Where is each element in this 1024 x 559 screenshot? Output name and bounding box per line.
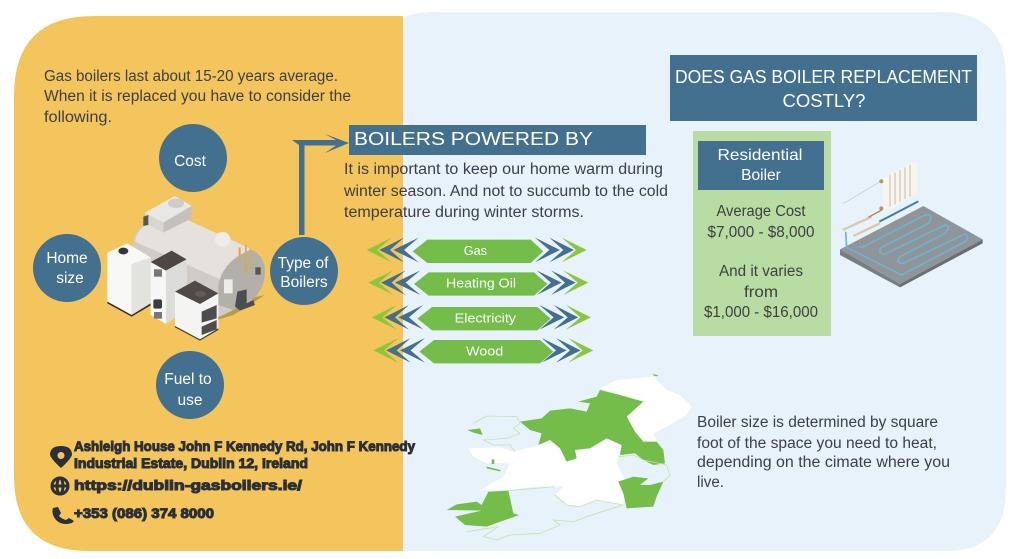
map: Ireland <box>447 374 692 540</box>
fuel list: chevron rows <box>367 238 593 363</box>
average cost text: $7,000 - $8,000 <box>708 224 815 241</box>
circle: fuel to use: Fuel to <box>164 371 212 388</box>
map region: green south west <box>447 491 519 527</box>
icon: boilers illustration <box>107 196 265 341</box>
circle: home size: size <box>56 270 84 287</box>
icon: globe <box>51 478 69 494</box>
circle: home size: Home <box>46 250 88 267</box>
circle: fuel to use <box>156 351 224 419</box>
cost range text: And it varies <box>719 263 803 280</box>
heading: boilers powered by: BOILERS POWERED BY <box>354 129 593 149</box>
circle: type of boilers: Boilers <box>280 274 328 291</box>
intro text <box>44 68 351 126</box>
text: boiler size: Boiler size is determined by square <box>697 414 938 431</box>
map region: green west islands <box>467 374 658 471</box>
average cost text <box>708 203 815 241</box>
panel: residential boiler cost <box>693 131 831 336</box>
map region: green south east <box>618 477 663 508</box>
fuel row: wood <box>373 338 593 363</box>
heading: boilers powered by <box>349 125 646 155</box>
fuel row: heating oil <box>368 270 588 296</box>
label: residential boiler <box>698 141 824 190</box>
body text: keep home warm: It is important to keep our home warm during <box>344 161 663 178</box>
fuel row: electricity <box>372 305 591 330</box>
circle: cost: Cost <box>174 153 207 170</box>
contact: phone: +353 (086) 374 8000 <box>74 506 214 521</box>
heading: does gas boiler replacement costly: DOES GAS BOILER REPLACEMENT <box>675 66 972 87</box>
circle: fuel to use: use <box>178 392 202 409</box>
contact: address: Ashleigh House John F Kennedy Rd, John F Kennedy <box>74 439 415 454</box>
circle: home size <box>33 234 101 302</box>
average cost text: Average Cost <box>716 203 806 220</box>
fuel row: gas <box>367 238 587 263</box>
body text: keep home warm: temperature during winter storms. <box>344 204 584 221</box>
text: boiler size: live. <box>697 474 724 491</box>
map region: white centre <box>468 438 625 507</box>
intro text: Gas boilers last about 15-20 years average. <box>44 68 338 85</box>
contact: address <box>74 439 415 471</box>
map outline: coast <box>467 416 670 540</box>
heading: does gas boiler replacement costly: COSTLY? <box>783 90 865 111</box>
circle: type of boilers <box>270 237 338 305</box>
arrow: type of boilers to boilers powered by <box>292 134 349 235</box>
label: residential boiler: Residential <box>718 147 802 164</box>
fuel row: gas: Gas <box>464 244 487 258</box>
body text: keep home warm <box>343 161 668 221</box>
contact: address: Industrial Estate, Dublin 12, Ireland <box>74 456 308 471</box>
intro text: following. <box>44 109 112 126</box>
icon: radiator and underfloor heating <box>840 162 983 287</box>
heading: does gas boiler replacement costly <box>670 55 977 121</box>
cost range text: from <box>744 284 778 301</box>
text: boiler size: depending on the cimate where you <box>697 454 950 471</box>
map region: white north <box>600 377 692 442</box>
circle: type of boilers: Type of <box>278 255 329 272</box>
text: boiler size: foot of the space you need to heat, <box>697 435 937 452</box>
panel: yellow left background <box>14 16 403 551</box>
cost range text <box>704 263 818 321</box>
circle: cost <box>159 124 227 192</box>
fuel row: electricity: Electricity <box>455 311 517 325</box>
panel: light blue right background <box>403 12 1006 551</box>
icon: location pin <box>50 446 72 468</box>
text: boiler size <box>697 414 950 491</box>
fuel row: wood: Wood <box>466 344 503 358</box>
intro text: When it is replaced you have to consider the <box>44 88 351 105</box>
cost range text: $1,000 - $16,000 <box>704 304 818 321</box>
fuel row: heating oil: Heating Oil <box>446 277 516 291</box>
contact: website: https://dublin-gasboilers.ie/ <box>74 478 302 493</box>
icon: phone <box>52 507 74 524</box>
body text: keep home warm: winter season. And not to succumb to the cold <box>343 183 668 200</box>
map region: green north midlands <box>520 390 665 465</box>
label: residential boiler: Boiler <box>741 167 781 184</box>
